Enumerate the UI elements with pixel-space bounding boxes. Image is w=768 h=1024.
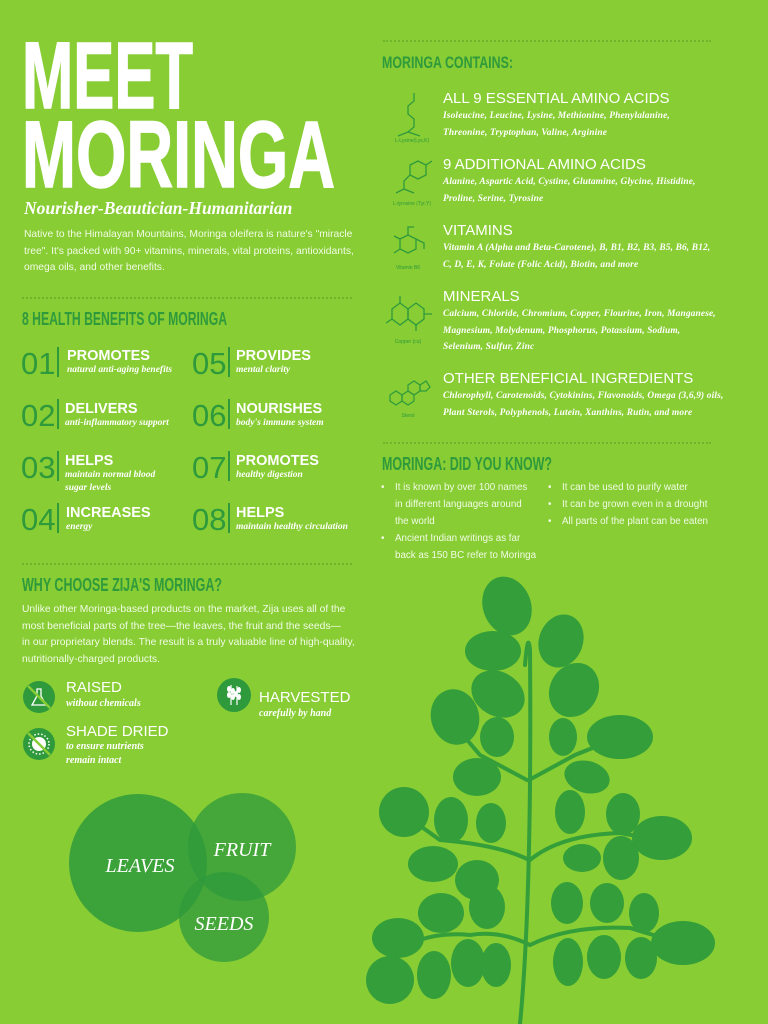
benefit 08: 08 <box>192 502 226 537</box>
item: minerals: Selenium, Sulfur, Zinc <box>443 342 534 352</box>
benefit 03: HELPS <box>65 453 113 469</box>
why paragraph: in our proprietary blends. The result is a truly valuable line of high-quality, <box>22 637 355 648</box>
item: additional amino acids: Proline, Serine, Tyrosine <box>443 194 543 204</box>
did you know bullets: in different languages around <box>395 499 522 510</box>
benefit 06: NOURISHES <box>236 401 322 417</box>
benefit 01: PROMOTES <box>67 348 150 364</box>
benefit 04 <box>21 502 151 537</box>
benefit 07: healthy digestion <box>236 470 303 480</box>
did you know bullets: the world <box>395 516 435 527</box>
did you know bullets: All parts of the plant can be eaten <box>562 516 708 527</box>
benefit 05 <box>192 346 311 381</box>
benefit 04: INCREASES <box>66 505 151 521</box>
did you know bullets: Ancient Indian writings as far <box>395 533 520 544</box>
did you know bullets: It can be grown even in a drought <box>562 499 707 510</box>
panel: benefits grid <box>21 346 348 537</box>
benefit 05: mental clarity <box>236 365 290 375</box>
benefit 04: 04 <box>21 502 55 537</box>
benefit 01 <box>21 346 172 381</box>
venn diagram: leaves fruit seeds: SEEDS <box>195 913 253 935</box>
benefit 02: anti-inflammatory support <box>65 418 169 428</box>
why paragraph: nutritionally-charged products. <box>22 654 160 664</box>
benefit 05: 05 <box>192 346 226 381</box>
benefit 02 <box>21 398 169 433</box>
icon: copper molecule <box>386 296 432 345</box>
benefit 01: natural anti-aging benefits <box>67 365 172 375</box>
item: vitamins: Vitamin A (Alpha and Beta-Carotene), B, B1, B2, B3, B5, B6, B12, <box>443 243 710 253</box>
benefit 05: PROVIDES <box>236 348 311 364</box>
feature: raised <box>23 679 141 713</box>
did you know bullets: It is known by over 100 names <box>395 482 527 493</box>
icon: vitamin b6 molecule: Vitamin B6 <box>396 265 420 271</box>
intro paragraph: Native to the Himalayan Mountains, Moringa oleifera is nature's "miracle tree". It's packed with 90+ vitamins, minerals, vital proteins, antioxidants, omega oils, and other benefits. <box>24 229 354 273</box>
why paragraph: Unlike other Moringa-based products on the market, Zija uses all of the <box>22 604 345 615</box>
item: minerals: MINERALS <box>443 288 520 305</box>
benefit 04: energy <box>66 522 92 532</box>
feature: harvested: carefully by hand <box>259 708 331 719</box>
item: vitamins <box>394 222 710 271</box>
did you know bullets: back as 150 BC refer to Moringa <box>395 550 536 561</box>
subtitle: Nourisher-Beautician-Humanitarian <box>24 198 292 218</box>
benefit 03: sugar levels <box>65 483 111 493</box>
why paragraph: most beneficial parts of the tree—the leaves, the fruit and the seeds— <box>22 620 341 632</box>
feature: shade dried: SHADE DRIED <box>66 723 169 740</box>
panel: contains list <box>386 90 723 419</box>
feature: raised: without chemicals <box>66 698 141 709</box>
item: other ingredients <box>389 370 723 419</box>
icon: copper molecule: Copper (cu) <box>395 339 422 345</box>
item: other ingredients: OTHER BENEFICIAL INGREDIENTS <box>443 370 693 387</box>
benefit 01: 01 <box>21 346 55 381</box>
benefit 03: 03 <box>21 450 55 485</box>
item: additional amino acids <box>393 156 696 207</box>
title <box>22 30 335 190</box>
item: essential amino acids <box>395 90 670 143</box>
benefit 08: HELPS <box>236 505 284 521</box>
icon: sterol molecule: Sterol <box>401 413 415 419</box>
icon: tyrosine molecule: L-tyrosine (Tyr,Y) <box>393 201 431 207</box>
icon: tyrosine molecule <box>393 160 432 207</box>
benefit 07: 07 <box>192 450 226 485</box>
item: vitamins: C, D, E, K, Folate (Folic Acid), Biotin, and more <box>443 260 638 270</box>
icon: vitamin b6 molecule <box>394 226 425 271</box>
benefit 06: 06 <box>192 398 226 433</box>
feature: harvested: HARVESTED <box>259 689 350 706</box>
benefit 02: DELIVERS <box>65 401 138 417</box>
benefit 06: body's immune system <box>236 418 324 428</box>
item: additional amino acids: Alanine, Aspartic Acid, Cystine, Glutamine, Glycine, Histidine, <box>443 177 696 187</box>
benefit 07 <box>192 450 319 485</box>
item: additional amino acids: 9 ADDITIONAL AMINO ACIDS <box>443 156 646 173</box>
feature: shade dried <box>23 723 169 766</box>
venn diagram: leaves fruit seeds <box>69 793 296 962</box>
icon: lysine molecule <box>395 93 430 143</box>
icon: sterol molecule <box>389 380 431 419</box>
venn diagram: leaves fruit seeds: FRUIT <box>213 839 272 861</box>
benefit 07: PROMOTES <box>236 453 319 469</box>
icon: wheat <box>217 678 251 712</box>
feature: harvested <box>217 678 350 719</box>
feature: shade dried: remain intact <box>66 755 121 766</box>
benefit 08: maintain healthy circulation <box>236 522 348 532</box>
item: essential amino acids: Threonine, Tryptophan, Valine, Arginine <box>443 128 607 138</box>
item: essential amino acids: Isoleucine, Leucine, Lysine, Methionine, Phenylalanine, <box>443 111 670 121</box>
feature: shade dried: to ensure nutrients <box>66 741 144 752</box>
benefit 03: maintain normal blood <box>65 470 155 480</box>
item: other ingredients: Plant Sterols, Polyphenols, Lutein, Xanthins, Rutin, and more <box>443 408 692 418</box>
why paragraph <box>22 604 355 664</box>
venn diagram: leaves fruit seeds: LEAVES <box>104 855 174 877</box>
icon: flask crossed <box>23 681 55 713</box>
item: vitamins: VITAMINS <box>443 222 513 239</box>
icon: sun crossed <box>23 728 55 760</box>
benefit 02: 02 <box>21 398 55 433</box>
item: minerals: Calcium, Chloride, Chromium, Copper, Flourine, Iron, Manganese, <box>443 309 716 319</box>
item: minerals <box>386 288 716 352</box>
did you know bullets <box>381 482 708 561</box>
item: essential amino acids: ALL 9 ESSENTIAL AMINO ACIDS <box>443 90 669 107</box>
feature: raised: RAISED <box>66 679 122 696</box>
item: other ingredients: Chlorophyll, Carotenoids, Cytokinins, Flavonoids, Omega (3,6,9) oils, <box>443 391 723 401</box>
benefit 06 <box>192 398 324 433</box>
item: minerals: Magnesium, Molydenum, Phosphorus, Potassium, Sodium, <box>443 326 680 336</box>
benefit 08 <box>192 502 348 537</box>
did you know bullets: It can be used to purify water <box>562 482 688 493</box>
benefit 03 <box>21 450 156 493</box>
